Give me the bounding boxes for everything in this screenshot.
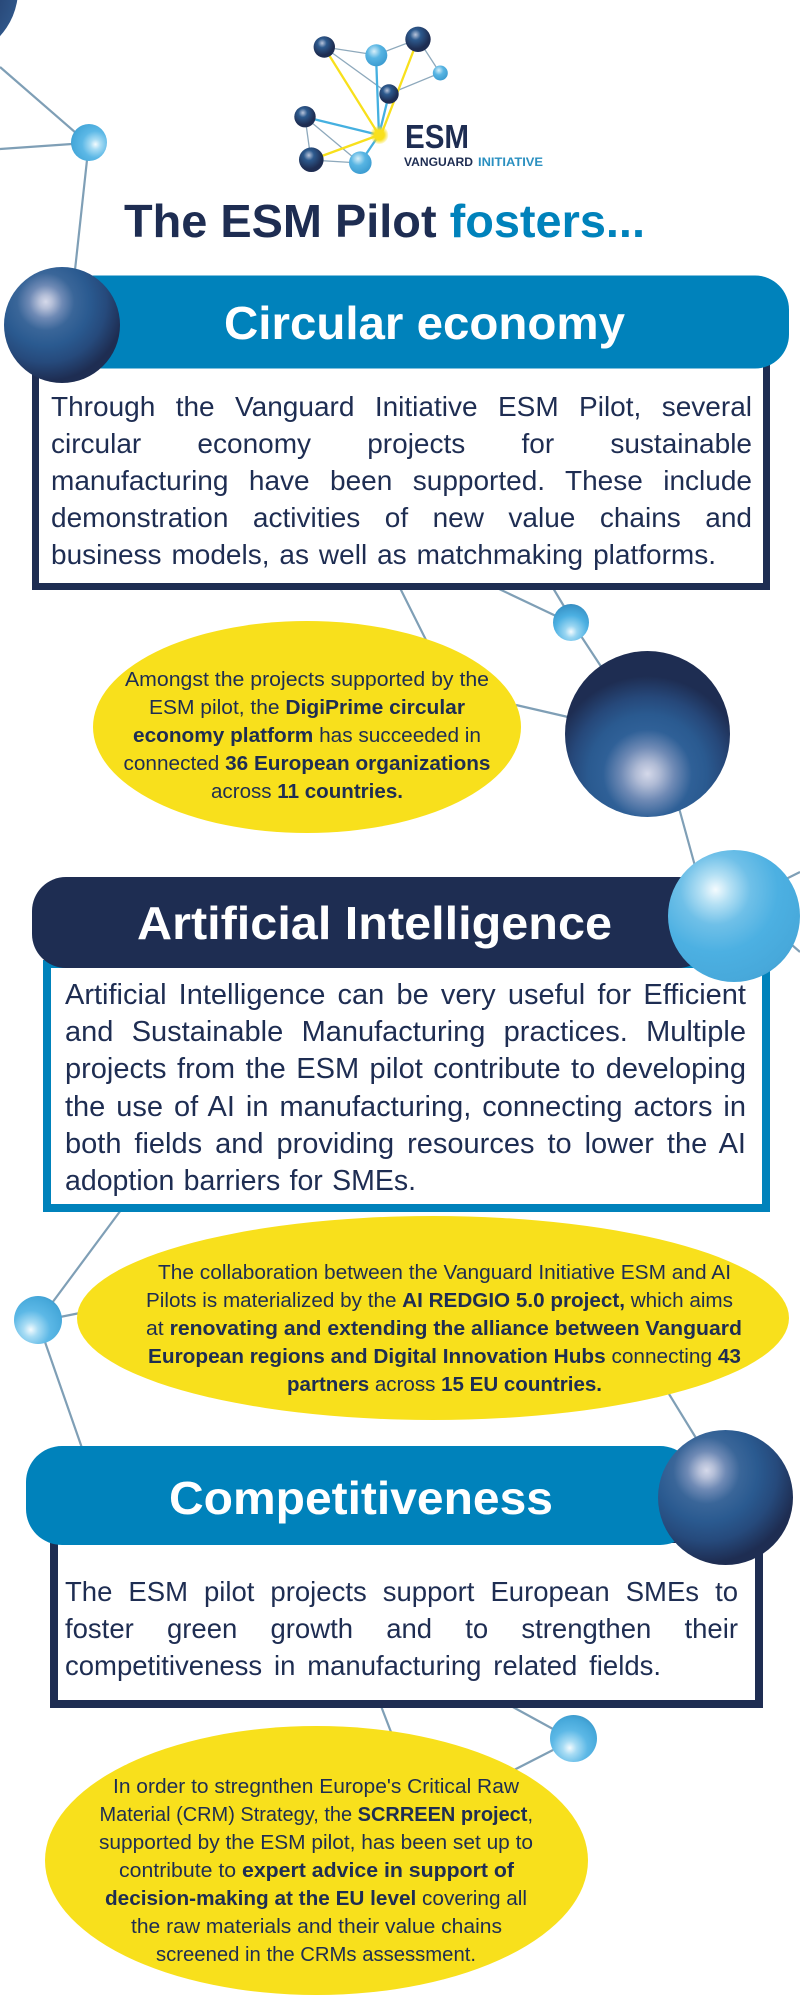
sphere: circular economy (4, 267, 120, 383)
panel: artificial intelligence text box: Artificial Intelligence can be very useful for Efficient (65, 978, 746, 1010)
callout: AI REDGIO 5.0: European regions and Digital Innovation Hubs connecting 43 (148, 1346, 741, 1368)
callout: AI REDGIO 5.0: The collaboration between the Vanguard Initiative ESM and AI (158, 1262, 731, 1284)
callout: DigiPrime platform: economy platform has succeeded in (133, 725, 481, 747)
panel: competitiveness text box: foster green growth and to strengthen their (65, 1613, 738, 1644)
panel: artificial intelligence text box: adoption barriers for SMEs. (65, 1164, 416, 1196)
small sphere above large dark sphere (553, 604, 589, 641)
panel: artificial intelligence text box: both fields and providing resources to lower the AI (65, 1128, 746, 1160)
decorative corner sphere (0, 0, 18, 58)
panel: artificial intelligence text box: projects from the ESM pilot contribute to developing (65, 1052, 746, 1084)
panel: circular economy text box (32, 360, 770, 590)
callout: SCRREEN project (45, 1726, 588, 1995)
callout: SCRREEN project: decision-making at the EU level covering all (105, 1888, 527, 1910)
small sphere left of AI callout (14, 1296, 62, 1344)
callout: SCRREEN project: Material (CRM) Strategy, the SCRREEN project, (100, 1804, 533, 1826)
heading banner: competitiveness: Competitiveness (169, 1472, 553, 1524)
panel: competitiveness text box (50, 1535, 763, 1708)
callout: DigiPrime platform (93, 621, 521, 833)
panel: circular economy text box: Through the Vanguard Initiative ESM Pilot, several (51, 391, 752, 422)
heading banner: competitiveness (26, 1446, 678, 1545)
callout: AI REDGIO 5.0 (77, 1216, 789, 1420)
callout: DigiPrime platform: connected 36 European organizations (124, 753, 490, 775)
sphere: artificial intelligence (668, 850, 800, 982)
small sphere at corner connector junction (71, 124, 107, 161)
heading banner: circular economy (92, 276, 789, 368)
callout: DigiPrime platform: across 11 countries. (211, 781, 403, 803)
callout: AI REDGIO 5.0: partners across 15 EU countries. (287, 1374, 602, 1396)
panel: artificial intelligence text box (43, 960, 770, 1212)
logo wordmark: ESM (405, 118, 469, 155)
sphere: competitiveness (658, 1430, 793, 1565)
panel: circular economy text box: circular economy projects for sustainable (51, 428, 752, 459)
panel: competitiveness text box: competitiveness in manufacturing related fields. (65, 1650, 661, 1681)
callout: SCRREEN project: the raw materials and their value chains (131, 1916, 502, 1938)
callout: SCRREEN project: contribute to expert advice in support of (119, 1860, 514, 1882)
panel: artificial intelligence text box: and Sustainable Manufacturing practices. Multiple (65, 1016, 746, 1048)
heading banner: artificial intelligence: Artificial Intelligence (137, 897, 612, 949)
heading banner: artificial intelligence (32, 877, 690, 968)
logo wordmark: INITIATIVE (478, 155, 543, 169)
callout: SCRREEN project: screened in the CRMs assessment. (156, 1944, 476, 1966)
panel: artificial intelligence text box: the use of AI in manufacturing, connecting actors in (65, 1090, 746, 1122)
ESM Vanguard Initiative logo (294, 26, 543, 174)
small sphere right of SCRREEN callout (550, 1715, 597, 1762)
panel: circular economy text box: manufacturing have been supported. These include (51, 465, 752, 496)
callout: AI REDGIO 5.0: Pilots is materialized by the AI REDGIO 5.0 project, which aims (146, 1290, 733, 1312)
logo nodes (294, 27, 448, 174)
panel: circular economy text box: business models, as well as matchmaking platforms. (51, 539, 716, 570)
heading banner: circular economy: Circular economy (224, 297, 625, 349)
callout: DigiPrime platform: Amongst the projects supported by the (125, 669, 489, 691)
large dark sphere (565, 651, 730, 817)
callout: SCRREEN project: supported by the ESM pilot, has been set up to (99, 1832, 533, 1854)
title: The ESM Pilot fosters... (124, 195, 645, 247)
callout: AI REDGIO 5.0: at renovating and extending the alliance between Vanguard (146, 1318, 742, 1340)
logo wordmark: VANGUARD (404, 155, 473, 169)
callout: DigiPrime platform: ESM pilot, the DigiPrime circular (149, 697, 465, 719)
callout: SCRREEN project: In order to stregnthen Europe's Critical Raw (113, 1776, 520, 1798)
panel: competitiveness text box: The ESM pilot projects support European SMEs to (65, 1576, 738, 1607)
panel: circular economy text box: demonstration activities of new value chains and (51, 502, 752, 533)
logo wordmark (404, 118, 543, 169)
